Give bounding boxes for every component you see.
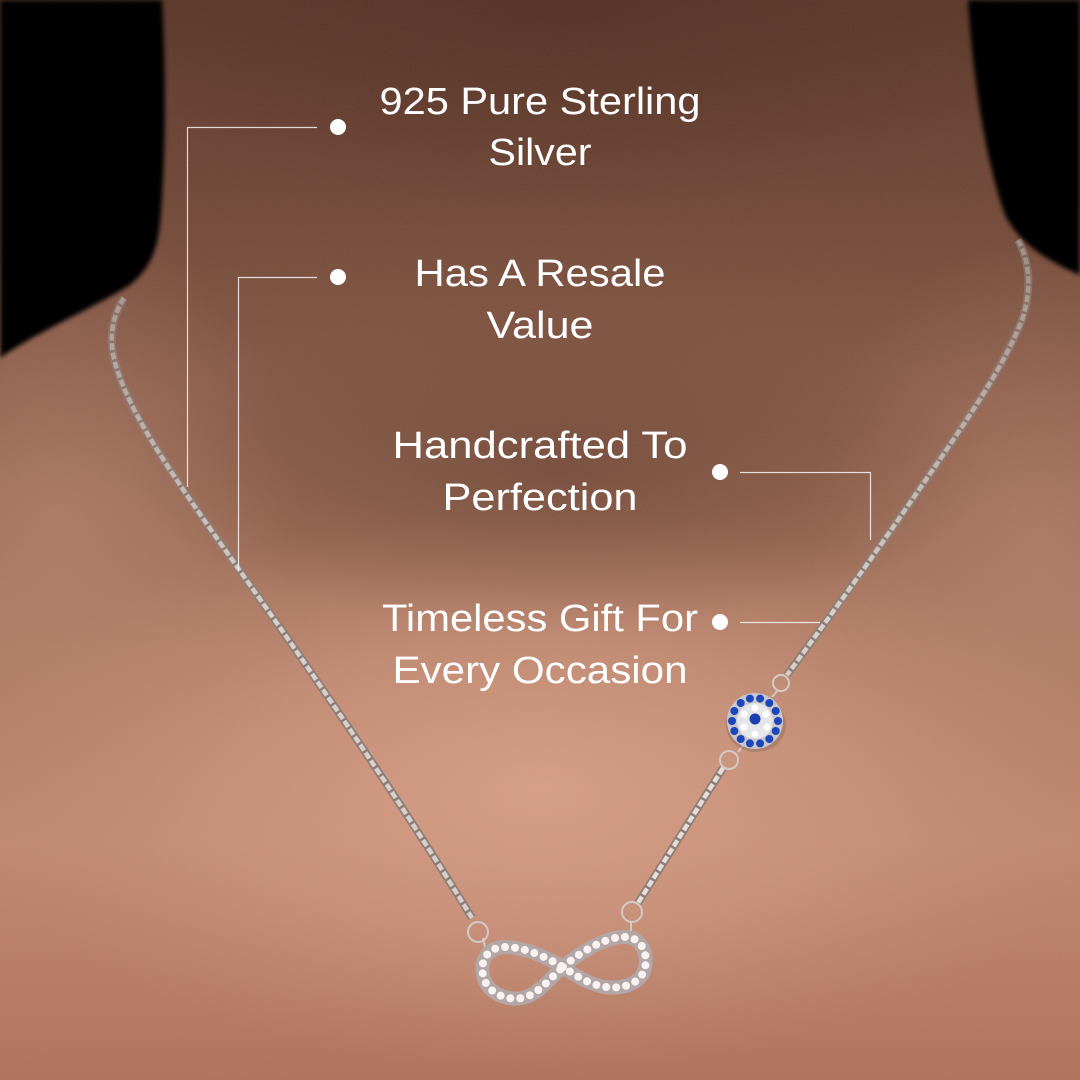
evil eye charm [726, 693, 786, 752]
chain: right side [787, 240, 1028, 675]
callout: Has A Resale Value [238, 253, 666, 570]
callout: 925 Pure Sterling Silver: Silver [488, 132, 592, 174]
callout: 925 Pure Sterling Silver [188, 81, 700, 487]
callout: Handcrafted To Perfection: Perfection [442, 477, 638, 519]
hair: left [0, 0, 165, 358]
callout: Handcrafted To Perfection: Handcrafted To [392, 425, 688, 467]
callout: Timeless Gift For Every Occasion: Every Occasion [392, 650, 688, 692]
hair: right [968, 0, 1080, 275]
necklace [112, 240, 1028, 999]
callout: Timeless Gift For Every Occasion: Timeless Gift For [382, 598, 698, 640]
callout: Has A Resale Value: Value [486, 305, 594, 347]
callout: Handcrafted To Perfection [392, 425, 870, 540]
callout: 925 Pure Sterling Silver: 925 Pure Sterling [380, 81, 700, 123]
infinity pendant [482, 937, 646, 999]
chain: between charms [638, 768, 723, 903]
callout: Has A Resale Value: Has A Resale [414, 253, 666, 295]
callout: Timeless Gift For Every Occasion [382, 598, 820, 692]
jump rings [468, 675, 789, 947]
chain: left side [112, 298, 472, 918]
